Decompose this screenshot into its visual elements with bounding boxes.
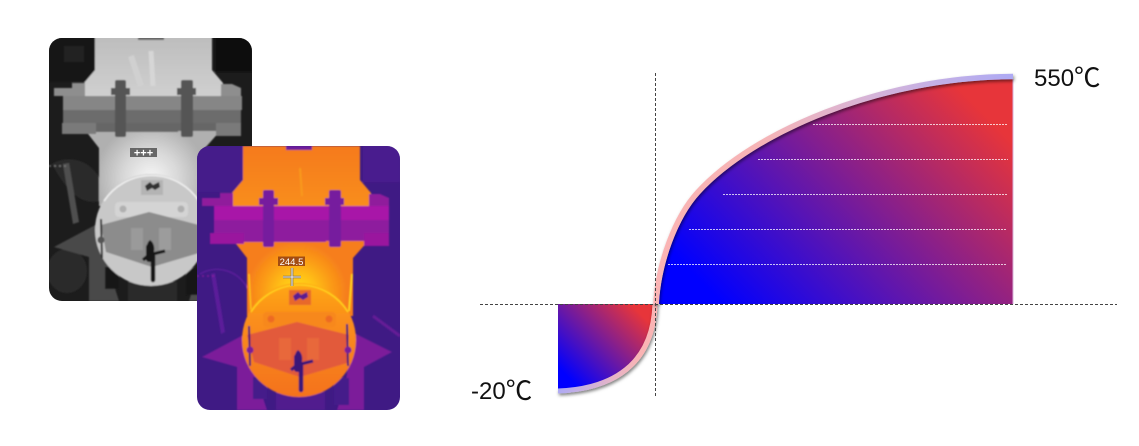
upper area: above zero region [656,76,1013,304]
label: minimum temperature: ℃ [506,376,532,406]
vertical axis [654,73,656,398]
label: maximum temperature: ℃ [1074,63,1101,93]
label: minimum temperature: -20 [471,378,506,405]
label: maximum temperature: 550 [1034,65,1074,92]
icon: measurement crosshair [283,268,301,286]
color thermal photo panel [197,146,400,410]
grayscale measurement label: +++ [134,147,153,159]
horizontal axis [480,304,1117,306]
temperature curve chart [471,63,1117,406]
grayscale thermal photo panel [47,36,252,301]
lower area: below zero region [558,304,655,391]
temperature reading label: 244.5 [280,257,303,268]
isotherm dashed lines [668,124,1008,264]
